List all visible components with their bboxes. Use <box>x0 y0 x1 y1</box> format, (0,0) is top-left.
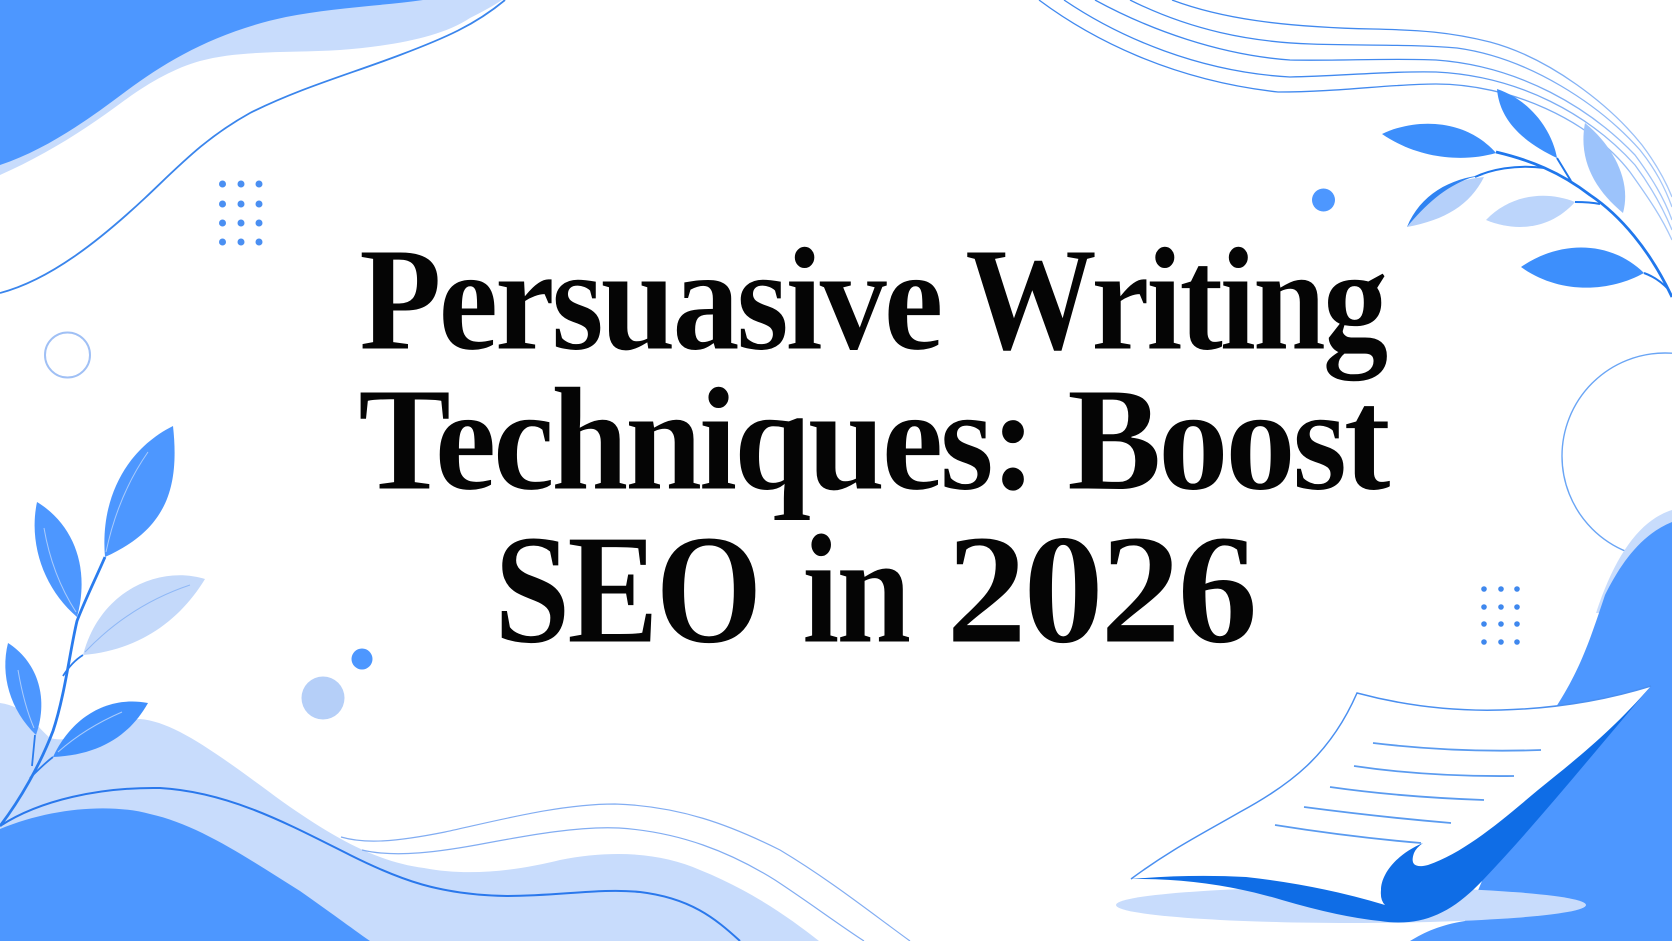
title: Persuasive <box>359 218 940 382</box>
paper shadow <box>1116 887 1586 923</box>
icon: curled paper document <box>1131 686 1651 922</box>
bottom-left wave shapes <box>0 703 910 941</box>
title: SEO <box>494 502 759 676</box>
branch with leaves top-right <box>1382 89 1672 297</box>
title: Writing <box>965 218 1388 382</box>
thin circle right <box>1562 353 1672 559</box>
title: Boost <box>1067 358 1391 522</box>
flowing lines top-right <box>1039 0 1672 240</box>
dot grid right <box>1481 586 1520 645</box>
dot grid top-left <box>219 180 262 246</box>
ring left <box>45 332 90 378</box>
branch with leaves bottom-left <box>0 426 205 826</box>
title <box>358 218 1391 676</box>
title: 2026 <box>946 502 1254 676</box>
title: in <box>802 502 909 676</box>
title: Techniques: <box>358 358 1033 522</box>
bottom-right wave shape <box>1410 510 1672 941</box>
top-left wave shapes <box>0 0 505 293</box>
dots bottom-left <box>302 648 372 720</box>
dot top-right <box>1312 188 1335 212</box>
